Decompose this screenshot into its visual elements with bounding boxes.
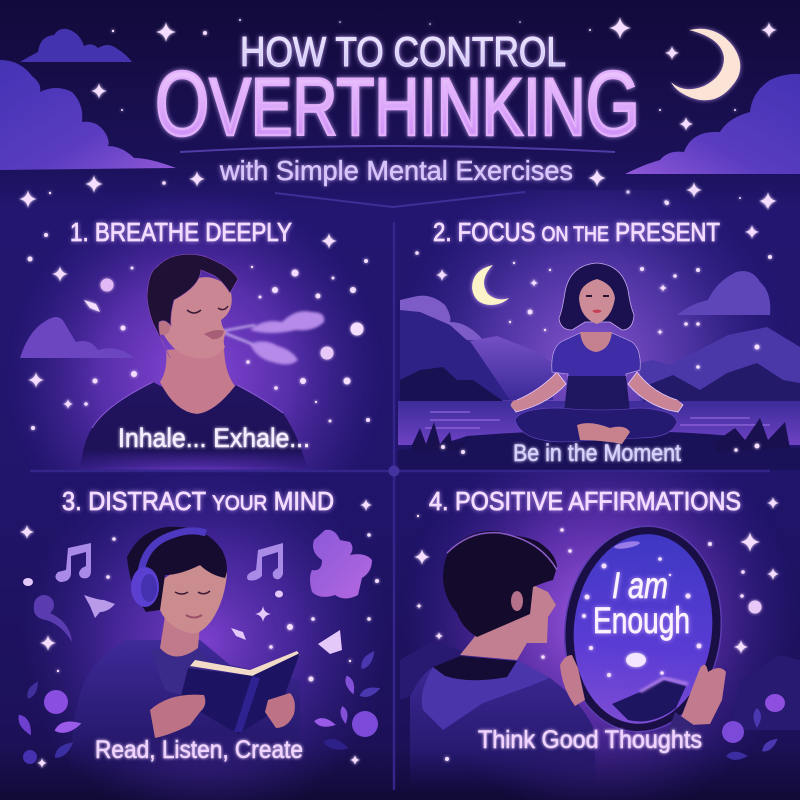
header chevron [275,192,525,207]
header clouds [0,29,800,174]
mirror [555,518,731,740]
panel 1 heading: 1. BREATHE DEEPLY [70,217,292,247]
person 1 [80,254,307,467]
hands holding mirror [560,655,726,740]
panel 4 stars [414,497,779,761]
music notes [55,543,283,582]
header stars [19,17,777,210]
panel 2 background glow [396,190,800,470]
mirror text: I am Enough: I am [612,565,668,606]
panel: header [0,17,800,210]
mirror stars [582,557,702,677]
panel 3 stars [20,499,379,768]
panel 2 landscape [398,271,800,470]
panel dividers [30,222,770,790]
panel 3 heading: 3. DISTRACT YOUR MIND [62,486,334,516]
open book [180,651,300,734]
distant hills [400,642,800,730]
puzzle piece [310,530,372,598]
panel 2 caption: Be in the Moment [513,440,681,467]
header divider [180,146,615,152]
panel 4 heading: 4. POSITIVE AFFIRMATIONS [429,486,741,516]
panel 4 background glow [396,472,800,800]
person 3 reading [70,527,300,772]
panel 4: positive affirmations [396,472,800,800]
meditating woman [511,263,683,444]
hands holding the book [150,693,295,738]
panel 2 stars [415,196,773,454]
title: how to control: HOW TO CONTROL [240,28,566,75]
panel 3 background glow [0,472,392,800]
foliage [15,648,382,764]
panel 2 heading: 2. FOCUS ON THE PRESENT [433,217,720,247]
panel 1 background glow [0,190,392,470]
floating shapes [23,578,342,654]
title: overthinking: OVERTHINKING [155,53,640,155]
person 4 from behind [410,531,597,790]
exhaled breath clouds [222,311,324,365]
mirror text: I am Enough: Enough [593,600,690,641]
panel 2: focus on the present [396,190,800,470]
panel 1: breathe deeply [0,190,392,470]
panel 3 caption: Read, Listen, Create [95,736,303,764]
panel 2 moon [472,265,509,305]
crescent moon [671,29,740,100]
panel 4 plant [722,694,785,760]
panel 3: distract your mind [0,472,392,800]
left cloud [20,317,134,358]
subtitle: with Simple Mental Exercises [219,155,573,186]
panel 1 caption: Inhale... Exhale... [118,423,310,453]
panel 1 stars [28,233,370,430]
panel 4 caption: Think Good Thoughts [478,726,702,754]
